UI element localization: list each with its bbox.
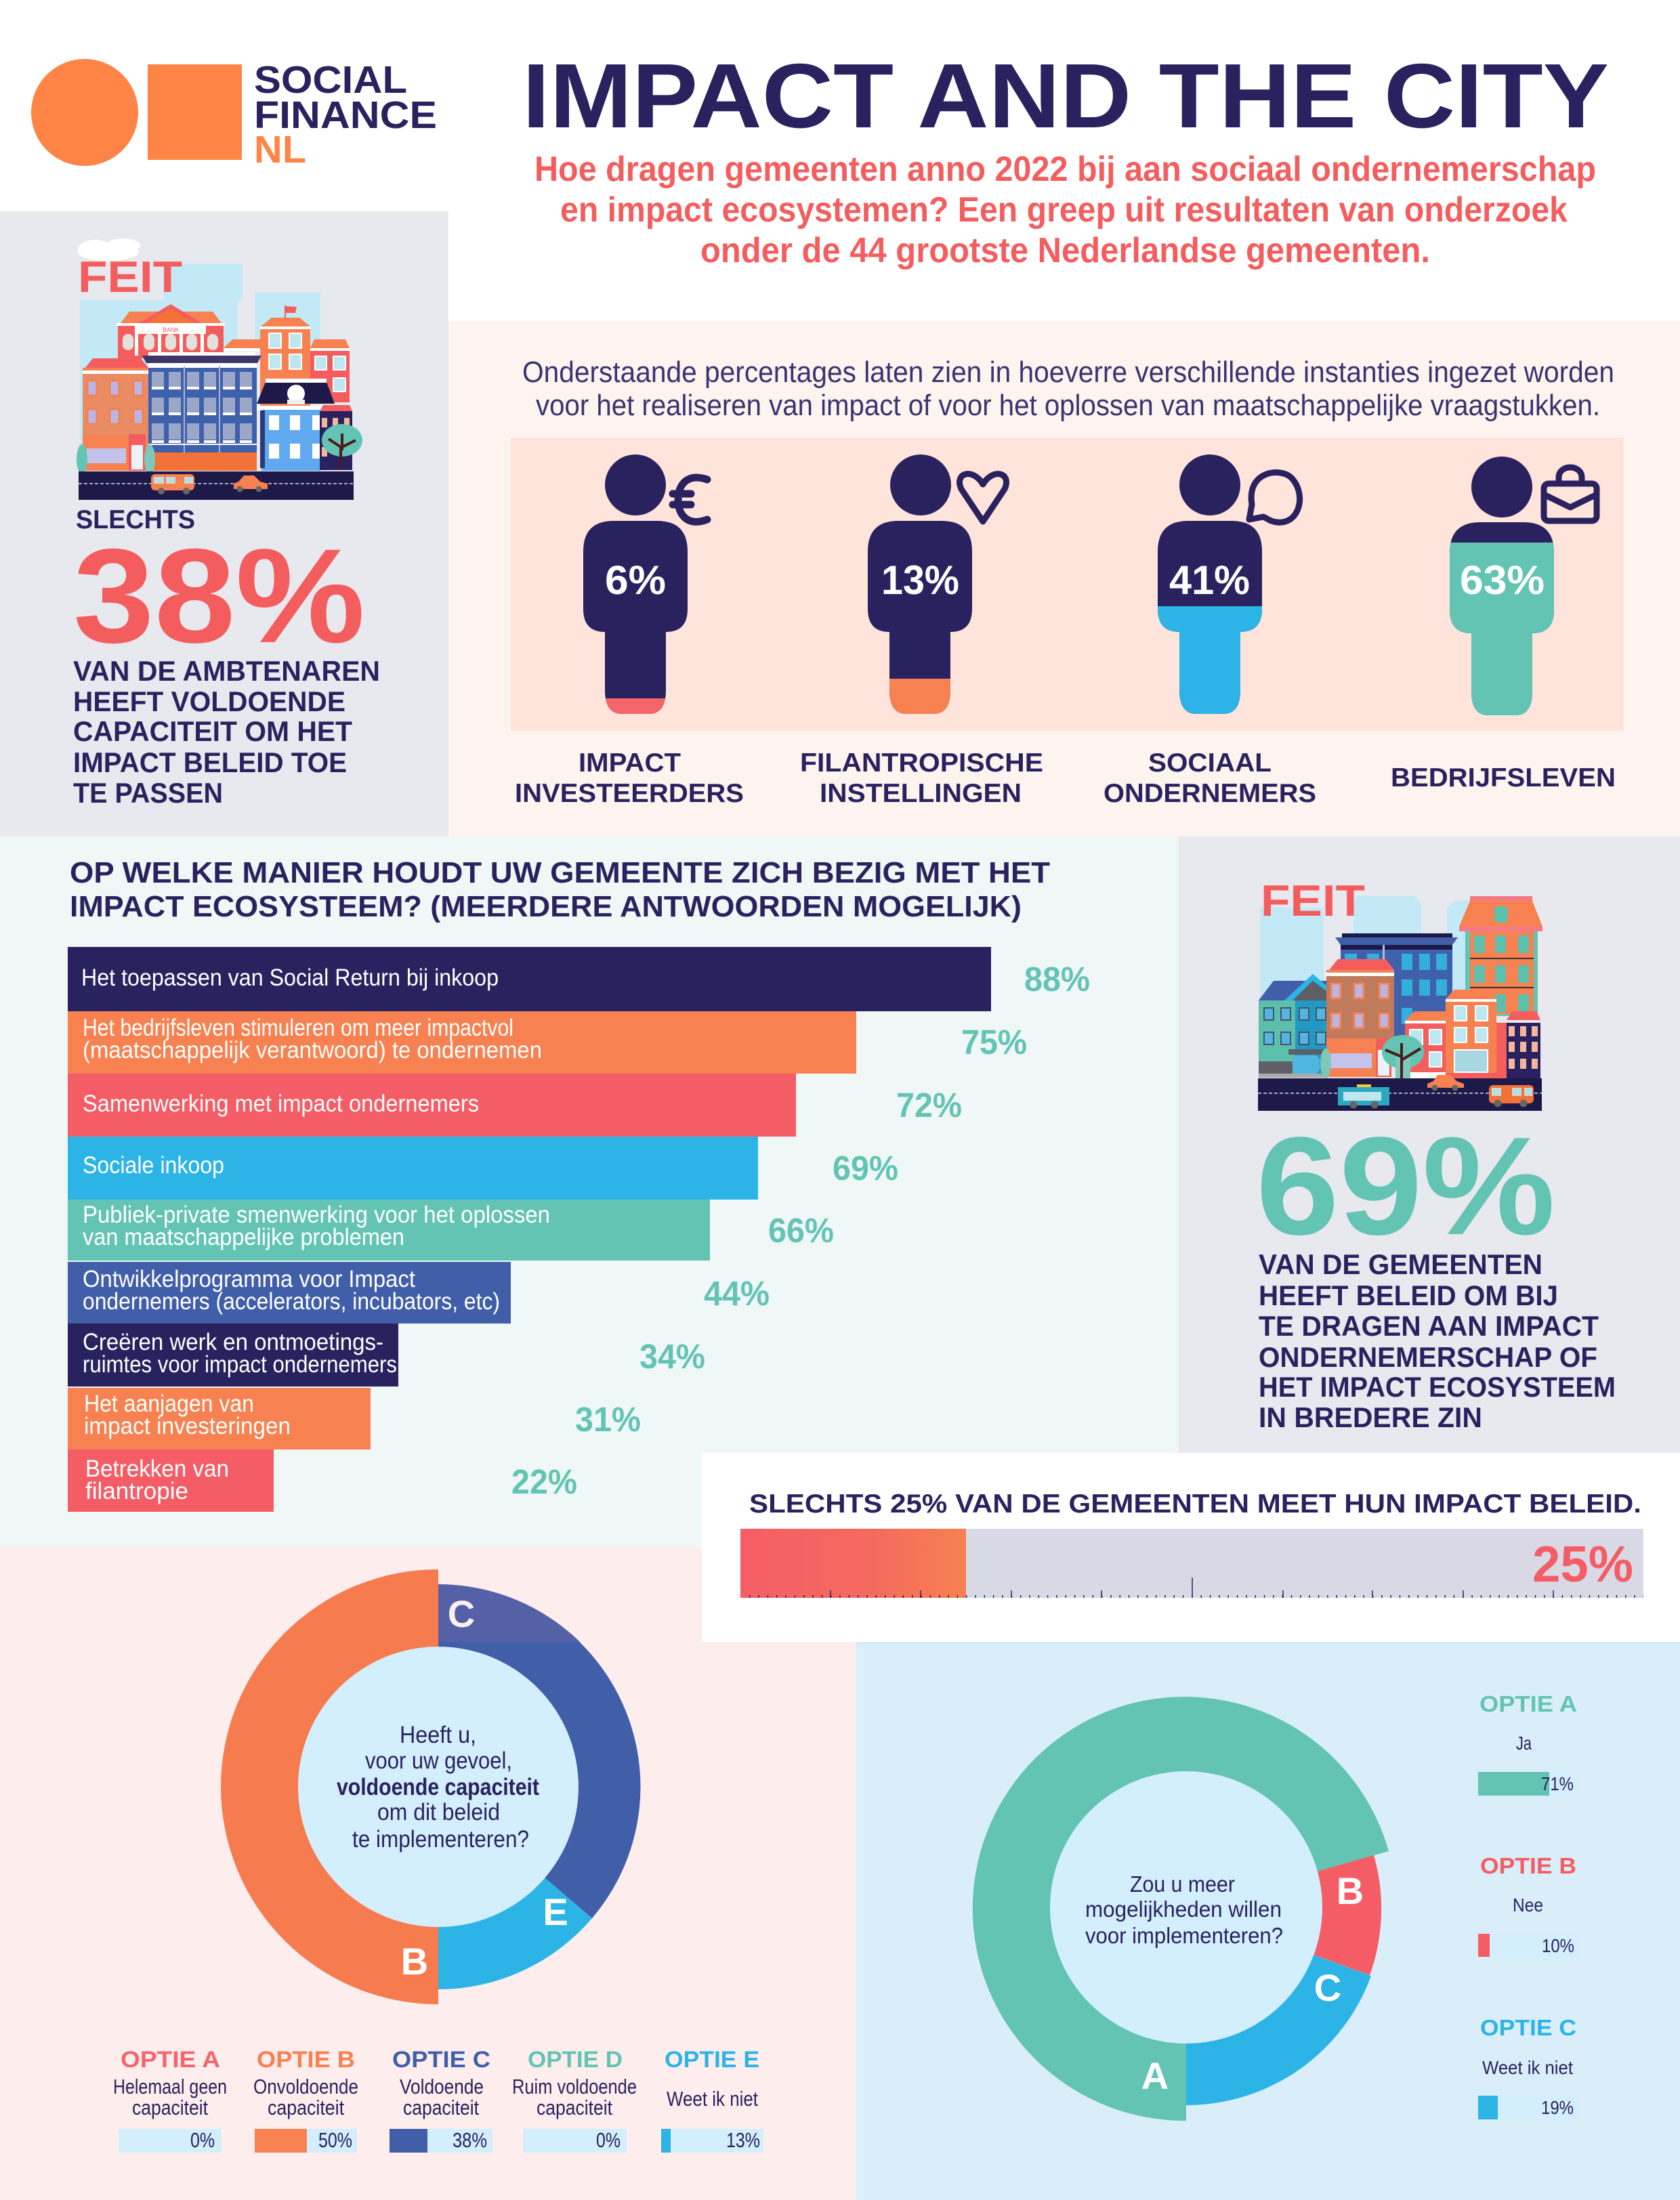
text: capaciteit ambtenaren: TE PASSEN — [73, 777, 223, 809]
text: vraag capaciteit: voldoende capaciteit — [337, 1774, 539, 1800]
label: feit: FEIT — [1261, 876, 1365, 925]
text: beleid gemeenten: VAN DE GEMEENTEN — [1259, 1248, 1542, 1280]
figure: filantropische instellingen 13 percent — [866, 454, 1006, 719]
legend: optie E: OPTIE E — [665, 2047, 759, 2073]
title: IMPACT AND THE CITY — [522, 45, 1609, 147]
figure: sociaal ondernemers 41 percent — [1156, 454, 1300, 721]
text: intro: Onderstaande percentages laten zien in hoeverre verschillende instanties ingezet worden — [522, 356, 1614, 389]
icon: euro — [673, 478, 707, 522]
bar: ontwikkelprogramma 44 percent: 44% — [704, 1274, 770, 1313]
legend: optie D: capaciteit — [537, 2096, 612, 2119]
bar: bedrijfsleven 75 percent — [68, 1011, 1027, 1074]
legend: optie D — [512, 2047, 637, 2153]
bar: bedrijfsleven 75 percent: (maatschappelijk verantwoord) te ondernemen — [83, 1037, 542, 1063]
panel: figures background — [511, 438, 1624, 731]
text: beleid gemeenten: IN BREDERE ZIN — [1259, 1401, 1482, 1433]
text: vraag capaciteit: te implementeren? — [352, 1826, 529, 1853]
legend: optie A: capaciteit — [132, 2096, 208, 2119]
bar: ontwikkelprogramma 44 percent: ondernemers (accelerators, incubators, etc) — [83, 1288, 500, 1315]
legend: optie C weet ik niet: OPTIE C — [1480, 2015, 1576, 2040]
legend: optie C weet ik niet: 19% — [1541, 2097, 1574, 2118]
legend: optie D: OPTIE D — [528, 2047, 623, 2073]
label: segment B: B — [1337, 1869, 1364, 1912]
legend: optie A ja: 71% — [1541, 1773, 1574, 1794]
bar: ontwikkelprogramma 44 percent: Ontwikkelprogramma voor Impact — [83, 1266, 415, 1292]
heading: slechts 25 percent: SLECHTS 25% VAN DE GEMEENTEN MEET HUN IMPACT BELEID. — [749, 1489, 1641, 1519]
bar: sociale inkoop 69 percent: Sociale inkoop — [83, 1152, 224, 1179]
label: segment B: B — [401, 1940, 428, 1983]
label: segment C: C — [1314, 1966, 1341, 2009]
text: capaciteit ambtenaren: CAPACITEIT OM HET — [73, 715, 352, 747]
illustration: city street one: BANK — [163, 326, 180, 333]
bar: publiek-private 66 percent — [68, 1200, 834, 1261]
text: vraag capaciteit: om dit beleid — [377, 1799, 500, 1825]
bar: impact investeringen 31 percent — [68, 1388, 641, 1450]
legend: optie A ja: OPTIE A — [1479, 1691, 1577, 1716]
legend: optie C: OPTIE C — [392, 2047, 490, 2073]
label: bedrijfsleven: BEDRIJFSLEVEN — [1391, 763, 1616, 792]
legend: optie B nee: 10% — [1542, 1935, 1574, 1956]
legend: optie D: Ruim voldoende — [512, 2075, 637, 2098]
bar: filantropie 22 percent: filantropie — [85, 1478, 188, 1504]
label: segment C: C — [448, 1592, 475, 1635]
legend: optie D: 0% — [596, 2128, 621, 2152]
figure: impact investeerders 6 percent: 6% — [605, 557, 666, 603]
text: vraag capaciteit — [337, 1722, 539, 1853]
bar: filantropie 22 percent: Betrekken van — [85, 1456, 229, 1482]
text: capaciteit ambtenaren — [73, 655, 380, 809]
legend: optie A: Helemaal geen — [113, 2075, 227, 2098]
subtitle — [534, 150, 1596, 270]
text: beleid gemeenten: HET IMPACT ECOSYSTEEM — [1259, 1371, 1616, 1403]
panel: instanties — [448, 321, 1680, 837]
text: vraag mogelijkheden: mogelijkheden willen — [1085, 1897, 1282, 1922]
label: segment A: A — [1141, 2054, 1169, 2097]
legend: optie B nee: Nee — [1513, 1895, 1543, 1916]
legend: optie B: 50% — [318, 2128, 352, 2152]
panel: meten impact beleid — [702, 1453, 1680, 1642]
text: beleid gemeenten: TE DRAGEN AAN IMPACT — [1259, 1310, 1599, 1342]
legend: optie C: capaciteit — [403, 2096, 479, 2119]
legend: optie C weet ik niet: Weet ik niet — [1482, 2057, 1573, 2078]
statistic: 69 percent: 69% — [1256, 1108, 1555, 1264]
bar: filantropie 22 percent — [68, 1450, 577, 1512]
label: impact investeerders: IMPACT — [579, 748, 681, 778]
bar: sociale inkoop 69 percent — [68, 1137, 898, 1200]
heading: question: IMPACT ECOSYSTEEM? (MEERDERE ANTWOORDEN MOGELIJK) — [70, 890, 1022, 923]
label: sociaal ondernemers: ONDERNEMERS — [1104, 779, 1316, 808]
label: filantropische instellingen: FILANTROPISCHE — [800, 748, 1043, 778]
bar: impact investeringen 31 percent: 31% — [575, 1400, 641, 1439]
progress bar: 25 percent: 25% — [1532, 1536, 1633, 1592]
legend: optie B: Onvoldoende — [253, 2075, 358, 2098]
legend: optie C: Voldoende — [400, 2075, 484, 2098]
legend: optie A ja: Ja — [1516, 1733, 1532, 1754]
bar: werk en ontmoetingsruimtes 34 percent: ruimtes voor impact ondernemers — [83, 1351, 397, 1378]
bar: publiek-private 66 percent: van maatschappelijke problemen — [83, 1224, 404, 1250]
text: beleid gemeenten: HEEFT BELEID OM BIJ — [1259, 1279, 1558, 1311]
legend: optie B: capaciteit — [268, 2096, 344, 2119]
figure: bedrijfsleven 63 percent: 63% — [1460, 557, 1545, 603]
icon: briefcase — [1544, 467, 1597, 521]
bar: publiek-private 66 percent: 66% — [768, 1211, 834, 1250]
text: beleid gemeenten: ONDERNEMERSCHAP OF — [1259, 1341, 1597, 1373]
legend: optie E: 13% — [726, 2128, 760, 2152]
figure: impact investeerders 6 percent — [581, 454, 707, 719]
panel: feit 69 percent — [1179, 837, 1680, 1453]
bar chart — [68, 947, 1090, 1512]
label: filantropische instellingen: INSTELLINGEN — [820, 779, 1022, 808]
subtitle: onder de 44 grootste Nederlandse gemeenten. — [700, 231, 1430, 270]
panel: feit 38 percent — [0, 211, 448, 837]
legend: optie A: OPTIE A — [121, 2047, 220, 2073]
legend: optie B nee — [1478, 1853, 1578, 1957]
bar: social return 88 percent: Het toepassen van Social Return bij inkoop — [81, 965, 499, 991]
legend: optie C — [390, 2047, 492, 2153]
bar: samenwerking 72 percent — [68, 1074, 962, 1137]
figure: filantropische instellingen 13 percent: 13% — [881, 557, 959, 603]
text: vraag mogelijkheden — [1085, 1871, 1283, 1948]
bar: publiek-private 66 percent: Publiek-private smenwerking voor het oplossen — [83, 1202, 550, 1228]
bar: werk en ontmoetingsruimtes 34 percent: Creëren werk en ontmoetings- — [83, 1329, 383, 1355]
text: vraag capaciteit: voor uw gevoel, — [365, 1748, 512, 1774]
legend: optie B: OPTIE B — [257, 2047, 355, 2073]
heading: question — [70, 856, 1050, 923]
bar: impact investeringen 31 percent: impact investeringen — [84, 1413, 291, 1439]
label: sociaal ondernemers — [1104, 748, 1316, 808]
bar: ontwikkelprogramma 44 percent — [68, 1262, 770, 1324]
bar: filantropie 22 percent: 22% — [511, 1462, 577, 1501]
icon: heart — [960, 474, 1006, 522]
progress bar: 25 percent — [740, 1529, 1643, 1598]
text: capaciteit ambtenaren: HEEFT VOLDOENDE — [73, 685, 345, 717]
illustration: city street one — [77, 238, 362, 500]
legend: optie C weet ik niet — [1478, 2015, 1578, 2119]
label: impact investeerders: INVESTEERDERS — [515, 779, 744, 808]
donut chart: capaciteit — [221, 1569, 640, 2004]
bar: werk en ontmoetingsruimtes 34 percent: 34% — [639, 1337, 705, 1376]
text: intro — [522, 356, 1614, 422]
logo: Social Finance NL — [31, 58, 437, 171]
text: vraag mogelijkheden: voor implementeren? — [1085, 1923, 1283, 1948]
subtitle: Hoe dragen gemeenten anno 2022 bij aan sociaal ondernemerschap — [534, 150, 1596, 189]
label: impact investeerders — [515, 748, 744, 808]
label: feit: FEIT — [78, 252, 182, 301]
subtitle: en impact ecosystemen? Een greep uit resultaten van onderzoek — [560, 190, 1568, 230]
heading: question: OP WELKE MANIER HOUDT UW GEMEENTE ZICH BEZIG MET HET — [70, 856, 1050, 889]
legend: optie C: 38% — [453, 2128, 487, 2152]
text: vraag capaciteit: Heeft u, — [400, 1722, 476, 1748]
legend: optie E — [661, 2047, 763, 2153]
text: capaciteit ambtenaren: VAN DE AMBTENAREN — [73, 655, 380, 687]
label: segment E: E — [543, 1890, 568, 1933]
panel: bar chart section — [0, 837, 1179, 1546]
panel: donut capaciteit — [0, 1546, 856, 2200]
figure: sociaal ondernemers 41 percent: 41% — [1169, 557, 1250, 603]
icon: speech bubble — [1249, 473, 1300, 522]
legend: optie B nee: OPTIE B — [1480, 1853, 1576, 1878]
legend: optie B — [253, 2047, 358, 2153]
illustration: city street two — [1258, 896, 1542, 1111]
statistic: 38 percent: 38% — [73, 521, 365, 671]
figure: bedrijfsleven 63 percent — [1448, 457, 1597, 719]
donut chart: mogelijkheden — [973, 1697, 1389, 2121]
logo: Social Finance NL: FINANCE — [254, 93, 437, 137]
bar: social return 88 percent — [68, 947, 1090, 1011]
bar: werk en ontmoetingsruimtes 34 percent — [68, 1324, 705, 1387]
legend: optie E: Weet ik niet — [667, 2087, 758, 2111]
legend: optie A ja — [1478, 1691, 1578, 1796]
text: capaciteit ambtenaren: IMPACT BELEID TOE — [73, 746, 347, 778]
bar: impact investeringen 31 percent: Het aanjagen van — [84, 1391, 254, 1417]
bar: social return 88 percent: 88% — [1024, 960, 1090, 998]
bar: bedrijfsleven 75 percent: 75% — [961, 1023, 1027, 1061]
text: beleid gemeenten — [1259, 1248, 1616, 1433]
bar: sociale inkoop 69 percent: 69% — [833, 1149, 898, 1187]
label: filantropische instellingen — [800, 748, 1043, 808]
panel: donut mogelijkheden — [856, 1642, 1680, 2200]
bar: bedrijfsleven 75 percent: Het bedrijfsleven stimuleren om meer impactvol — [83, 1015, 513, 1041]
text: intro: voor het realiseren van impact of voor het oplossen van maatschappelijke vraagstukken. — [536, 389, 1600, 422]
logo: Social Finance NL: SOCIAL — [254, 58, 407, 102]
legend: optie A: 0% — [190, 2128, 215, 2152]
logo: Social Finance NL: NL — [254, 128, 306, 171]
text: slechts: SLECHTS — [76, 505, 195, 534]
legend: optie A — [113, 2047, 227, 2153]
bar: samenwerking 72 percent: Samenwerking met impact ondernemers — [83, 1091, 479, 1117]
label: sociaal ondernemers: SOCIAAL — [1148, 748, 1272, 778]
text: vraag mogelijkheden: Zou u meer — [1130, 1871, 1235, 1897]
bar: samenwerking 72 percent: 72% — [896, 1086, 962, 1124]
